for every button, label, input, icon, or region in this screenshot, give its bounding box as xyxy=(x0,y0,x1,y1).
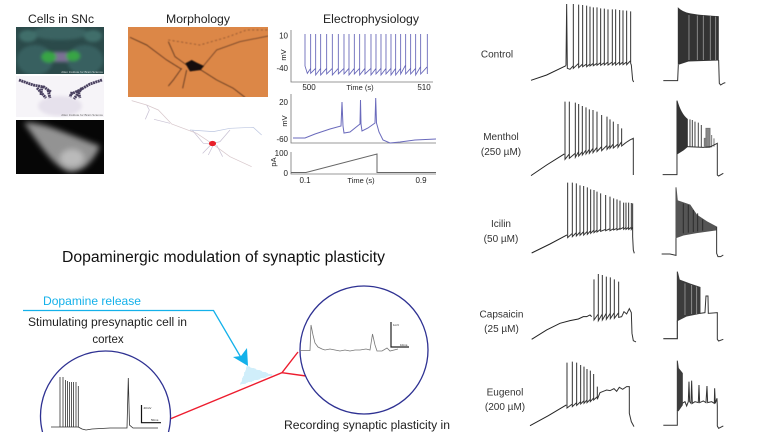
image: stained atlas section: Allen Institute for Brain Science xyxy=(61,113,103,117)
panel: postsynaptic recording circle xyxy=(300,286,428,414)
heading: Electrophysiology: Electrophysiology xyxy=(323,12,420,26)
diagram: traced neuron morphology xyxy=(132,101,262,167)
label: Capsaicin: (25 µM) xyxy=(484,324,519,335)
trace: Eugenol ramp xyxy=(530,362,634,427)
chart: spontaneous firing trace: 10 xyxy=(279,32,289,40)
label: Capsaicin: Capsaicin xyxy=(480,310,523,320)
chart: ramp-evoked spikes: 20 xyxy=(279,98,289,107)
chart: presynaptic spike trace xyxy=(51,377,158,430)
label: Dopamine release: Dopamine release xyxy=(43,294,141,308)
chart: spontaneous firing trace: -40 xyxy=(276,64,289,73)
label: Menthol xyxy=(481,132,521,158)
heading: Dopaminergic modulation of synaptic plasticity: Dopaminergic modulation of synaptic plasticity xyxy=(62,249,385,266)
trace: Control ramp xyxy=(531,4,634,82)
trace: Menthol ramp xyxy=(531,102,633,176)
diagram: red axon xyxy=(170,352,306,419)
chart: spontaneous firing trace: mV xyxy=(279,49,288,61)
chart: ramp-evoked spikes: mV xyxy=(280,115,289,127)
text: recording synaptic plasticity: Recording synaptic plasticity in xyxy=(284,420,450,432)
icon: dopamine vesicle cloud xyxy=(240,366,273,385)
chart: current ramp: 0 xyxy=(284,169,289,178)
chart: current ramp: 0.1 xyxy=(299,176,311,185)
scale bar: presynaptic xyxy=(142,405,161,423)
heading: Morphology: Morphology xyxy=(166,12,231,26)
image: fluorescence micrograph xyxy=(16,120,104,174)
chart: spontaneous firing trace xyxy=(276,30,433,92)
text: stimulating presynaptic cell: cortex xyxy=(92,334,124,346)
scale bar: postsynaptic xyxy=(391,322,409,347)
trace: Eugenol step xyxy=(663,361,723,428)
arrow: dopamine release pathway xyxy=(23,310,248,366)
label: Icilin: Icilin xyxy=(491,219,511,230)
label: Control: Control xyxy=(481,50,513,60)
heading: Cells in SNc: Cells in SNc xyxy=(28,12,94,26)
text: stimulating presynaptic cell: Stimulating presynaptic cell in xyxy=(28,317,187,329)
chart: current ramp: 100 xyxy=(275,149,289,158)
image: stained atlas section xyxy=(16,76,104,117)
scale bar: postsynaptic: 10ms xyxy=(400,343,408,347)
label: Menthol: (250 µM) xyxy=(481,147,521,158)
chart: current ramp xyxy=(269,149,436,185)
trace: Control step xyxy=(663,8,725,85)
scale bar: presynaptic: 40mV xyxy=(144,406,151,410)
label: Icilin: (50 µM) xyxy=(484,234,518,245)
panel: presynaptic recording circle xyxy=(41,351,171,432)
icon: red neuron soma xyxy=(209,141,216,146)
label: Menthol: Menthol xyxy=(483,132,519,143)
label: Eugenol xyxy=(485,388,525,413)
chart: spontaneous firing trace: 510 xyxy=(417,83,431,92)
chart: ramp-evoked spikes xyxy=(276,94,436,144)
chart: current ramp: 0.9 xyxy=(415,176,427,185)
label: Capsaicin xyxy=(480,310,523,335)
trace: Capsaicin ramp xyxy=(532,274,636,342)
image: brain atlas section with green SNc xyxy=(16,26,104,75)
label: Icilin xyxy=(484,219,518,245)
trace: Icilin ramp xyxy=(532,183,634,253)
text: stimulating presynaptic cell xyxy=(28,317,187,346)
chart: postsynaptic trace xyxy=(300,325,398,351)
chart: current ramp: Time (s) xyxy=(347,176,375,185)
trace: Menthol step xyxy=(663,101,723,176)
image: brain atlas section with green SNc: Allen Institute for Brain Science xyxy=(61,70,103,74)
chart: spontaneous firing trace: 500 xyxy=(302,83,316,92)
trace: Capsaicin step xyxy=(663,272,723,341)
label: Eugenol: Eugenol xyxy=(487,388,523,398)
scale bar: postsynaptic: 1mV xyxy=(393,323,399,327)
chart: ramp-evoked spikes: -60 xyxy=(276,135,289,144)
chart: current ramp: pA xyxy=(269,157,278,167)
image: stained neuron on orange background xyxy=(128,27,268,97)
chart: spontaneous firing trace: Time (s) xyxy=(346,83,374,92)
trace: Icilin step xyxy=(662,187,723,257)
label: Eugenol: (200 µM) xyxy=(485,402,525,413)
scale bar: presynaptic: 50ms xyxy=(151,418,159,422)
